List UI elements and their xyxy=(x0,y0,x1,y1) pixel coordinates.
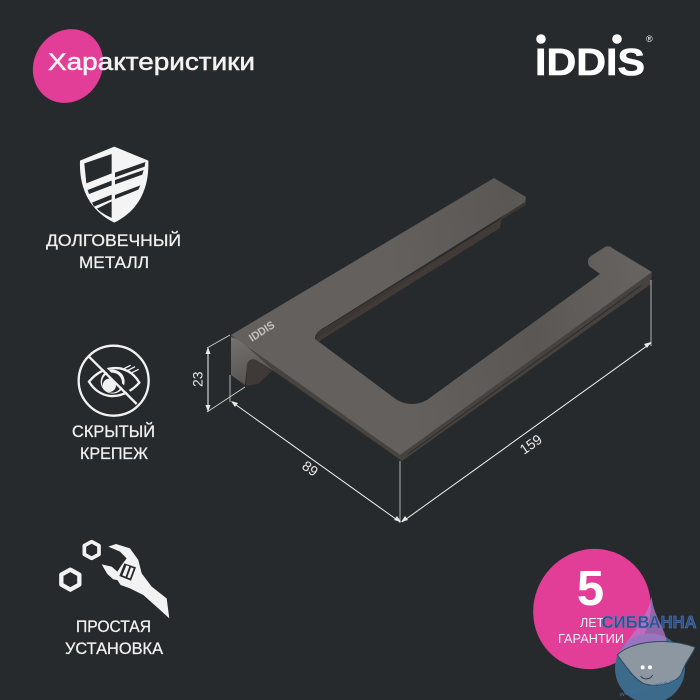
stamp on product: IDDIS xyxy=(247,319,277,345)
icon: shield xyxy=(80,147,148,223)
label: Простая установка xyxy=(65,618,163,658)
dimension: 23: 23 xyxy=(190,371,206,387)
heading: Характеристики: Характеристики xyxy=(48,49,255,76)
dimension: 23 xyxy=(190,335,245,412)
label: Простая установка: УСТАНОВКА xyxy=(65,640,163,658)
watermark: Сибванна: СИБВАННА xyxy=(602,612,697,632)
dark line on the right arm xyxy=(408,285,642,454)
product: towel/paper holder xyxy=(231,178,652,461)
label: Скрытый крепеж: СКРЫТЫЙ xyxy=(72,422,155,441)
label: Долговечный металл xyxy=(46,231,181,272)
icon: crossed eye xyxy=(79,346,149,416)
dimension: 159 xyxy=(401,280,651,522)
front-right bevel xyxy=(400,272,652,461)
warranty badge: ГАРАНТИИ xyxy=(558,632,624,646)
leg shadow notch xyxy=(246,359,272,386)
warranty badge: 5 xyxy=(577,562,604,616)
logo: IDDIS: IDDIS xyxy=(535,42,645,84)
label: Долговечный металл: ДОЛГОВЕЧНЫЙ xyxy=(46,231,181,250)
front-left bevel xyxy=(231,335,402,461)
dimension: 89 xyxy=(230,375,401,523)
warranty badge: ЛЕТ xyxy=(580,616,605,630)
leg end xyxy=(231,337,275,385)
watermark: Сибванна: www.sibvanna.ru xyxy=(619,678,677,699)
label: Долговечный металл: МЕТАЛЛ xyxy=(79,254,149,272)
label: Скрытый крепеж xyxy=(72,422,155,463)
dimension: 89: 89 xyxy=(299,457,321,480)
label: Скрытый крепеж: КРЕПЕЖ xyxy=(80,445,149,463)
label: Простая установка: ПРОСТАЯ xyxy=(76,618,151,636)
dimension: 159: 159 xyxy=(517,431,545,457)
icon: wrench and nuts xyxy=(61,542,169,618)
heading: Характеристики xyxy=(19,16,255,116)
underside of upper arm xyxy=(315,200,526,340)
warranty badge xyxy=(510,527,674,691)
top surface xyxy=(231,178,652,455)
watermark: Сибванна xyxy=(602,597,697,700)
logo: IDDIS: ® xyxy=(646,34,653,44)
